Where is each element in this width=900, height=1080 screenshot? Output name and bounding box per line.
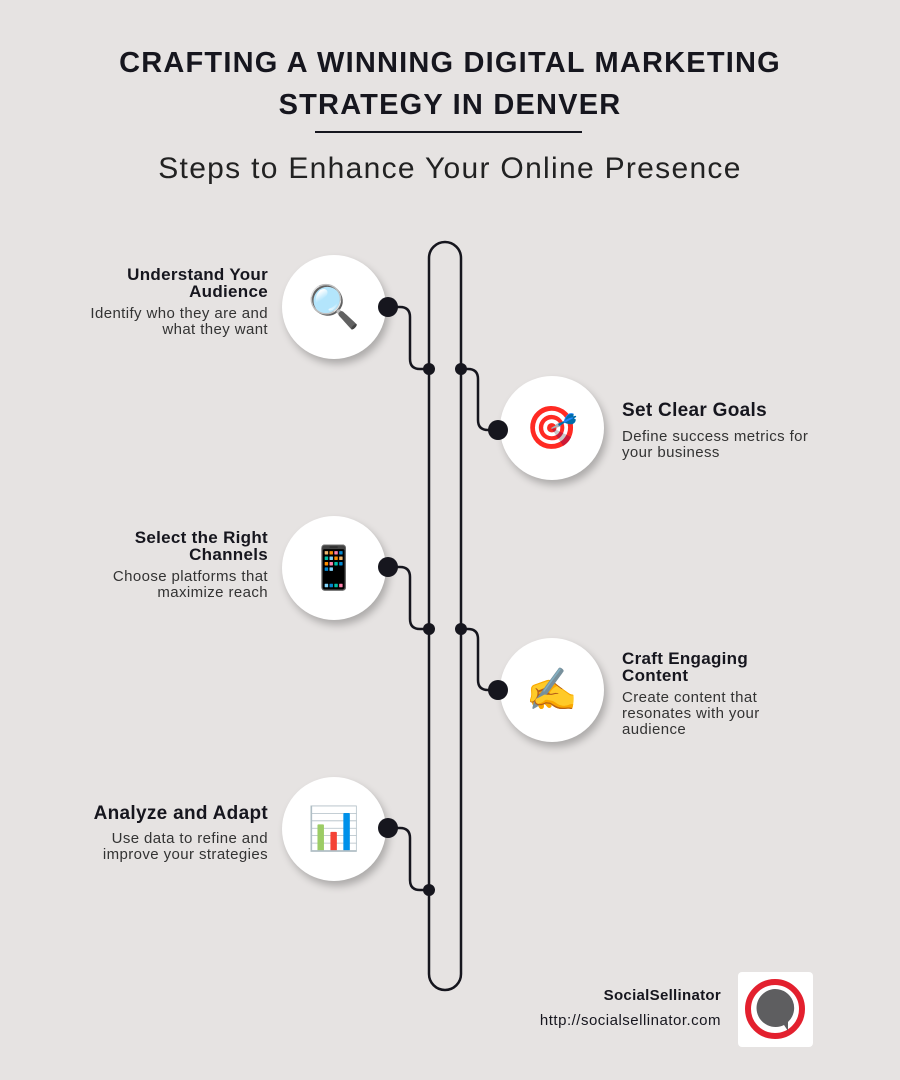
step 3 text: Choose platforms that <box>113 568 268 585</box>
step 4 icon: ✍️ <box>526 666 578 714</box>
step 1 text: Understand Your <box>127 265 268 284</box>
step 4 text: Craft Engaging <box>622 649 748 668</box>
step 1 text: what they want <box>162 321 268 338</box>
step 1 text <box>90 265 268 338</box>
step 2 dot <box>488 420 508 440</box>
step 4 text: resonates with your <box>622 705 760 722</box>
title underline <box>315 131 582 133</box>
footer brand text: SocialSellinator <box>604 987 721 1004</box>
step 3 icon <box>282 516 386 620</box>
step 3 text: Channels <box>189 545 268 564</box>
logo <box>738 972 813 1047</box>
title: CRAFTING A WINNING DIGITAL MARKETING <box>119 47 781 79</box>
step 5 icon: 📊 <box>308 804 360 854</box>
step 1 icon: 🔍 <box>308 282 360 332</box>
step 5 dot <box>378 818 398 838</box>
step 5 text <box>94 803 268 863</box>
step 4 text: Create content that <box>622 689 757 706</box>
step 5 icon <box>282 777 386 881</box>
step 5 text: Use data to refine and <box>112 830 268 847</box>
step 4 dot <box>488 680 508 700</box>
step 2 text: Define success metrics for <box>622 428 808 445</box>
step 4 text: audience <box>622 721 686 738</box>
step 1 text: Audience <box>189 282 268 301</box>
step 1 icon <box>282 255 386 359</box>
title <box>119 47 781 121</box>
step 2 text: your business <box>622 444 720 461</box>
footer brand text: http://socialsellinator.com <box>540 1012 721 1029</box>
step 1 text: Identify who they are and <box>90 305 268 322</box>
step 3 dot <box>378 557 398 577</box>
step 4 text: Content <box>622 666 688 685</box>
step 2 text: Set Clear Goals <box>622 400 767 421</box>
step 2 text <box>622 400 808 461</box>
title: STRATEGY IN DENVER <box>279 89 621 121</box>
step 4 icon <box>500 638 604 742</box>
step 1 dot <box>378 297 398 317</box>
step 3 text <box>113 528 268 601</box>
step 4 text <box>622 649 760 738</box>
step 5 text: improve your strategies <box>103 846 268 863</box>
step 3 icon: 📱 <box>308 544 360 592</box>
step 2 icon: 🎯 <box>526 404 578 452</box>
step 2 icon <box>500 376 604 480</box>
footer brand text <box>540 987 721 1029</box>
step 5 text: Analyze and Adapt <box>94 803 268 824</box>
subtitle: Steps to Enhance Your Online Presence <box>158 152 742 185</box>
step 3 text: maximize reach <box>157 584 268 601</box>
step 3 text: Select the Right <box>135 528 268 547</box>
